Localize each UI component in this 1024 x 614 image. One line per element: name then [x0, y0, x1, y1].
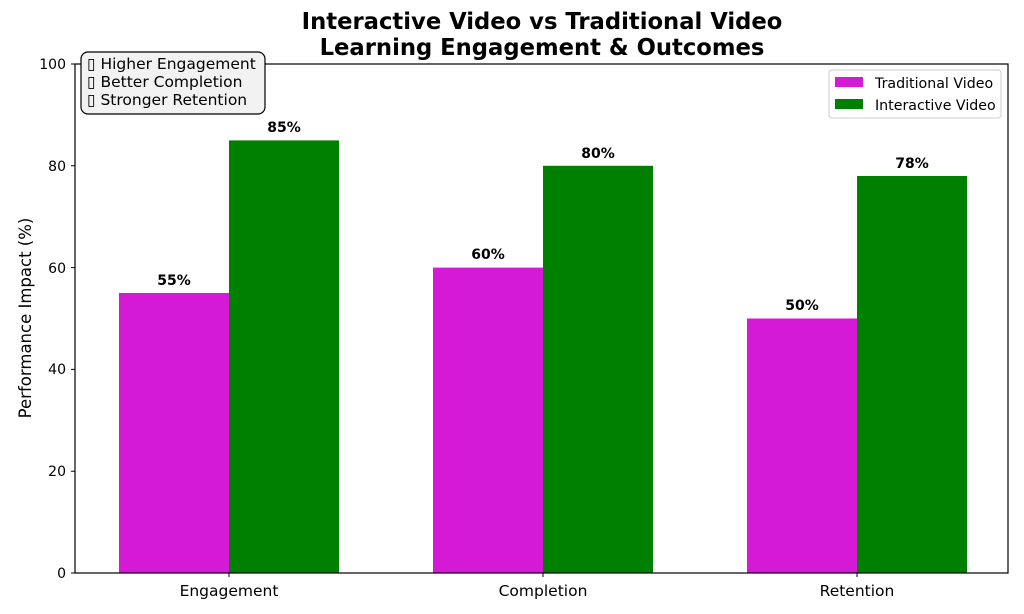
bar chart — [119, 140, 967, 573]
callout: benefits: ▯ Better Completion — [87, 73, 242, 91]
y axis ticks: 40 — [48, 362, 66, 378]
value labels: 80% — [581, 146, 615, 162]
value labels — [157, 120, 929, 314]
y axis ticks: 0 — [57, 566, 66, 582]
y axis ticks: 100 — [39, 57, 66, 73]
callout: benefits: ▯ Stronger Retention — [87, 91, 247, 109]
callout: benefits: ▯ Higher Engagement — [87, 55, 256, 73]
axes frame — [75, 64, 1008, 573]
value labels: 78% — [895, 156, 929, 172]
title: Learning Engagement & Outcomes — [320, 35, 764, 61]
value labels: 85% — [267, 120, 301, 136]
y axis ticks: 60 — [48, 261, 66, 277]
title — [302, 9, 782, 61]
value labels: 50% — [785, 298, 819, 314]
y axis label: Performance Impact (%) — [16, 218, 35, 418]
y axis ticks: 80 — [48, 159, 66, 175]
callout: benefits — [81, 52, 265, 114]
legend — [829, 70, 1001, 118]
x axis labels: Completion — [499, 582, 587, 600]
legend: Traditional Video — [874, 76, 993, 92]
x axis labels: Engagement — [180, 582, 278, 600]
title: Interactive Video vs Traditional Video — [302, 9, 782, 35]
bars: completion — [433, 166, 653, 573]
y axis ticks — [39, 57, 75, 582]
bars: engagement — [119, 140, 339, 573]
value labels: 60% — [471, 247, 505, 263]
value labels: 55% — [157, 273, 191, 289]
y axis ticks: 20 — [48, 464, 66, 480]
bars: retention — [747, 176, 967, 573]
x axis labels — [180, 573, 894, 600]
x axis labels: Retention — [820, 582, 894, 600]
legend: Interactive Video — [875, 98, 996, 114]
